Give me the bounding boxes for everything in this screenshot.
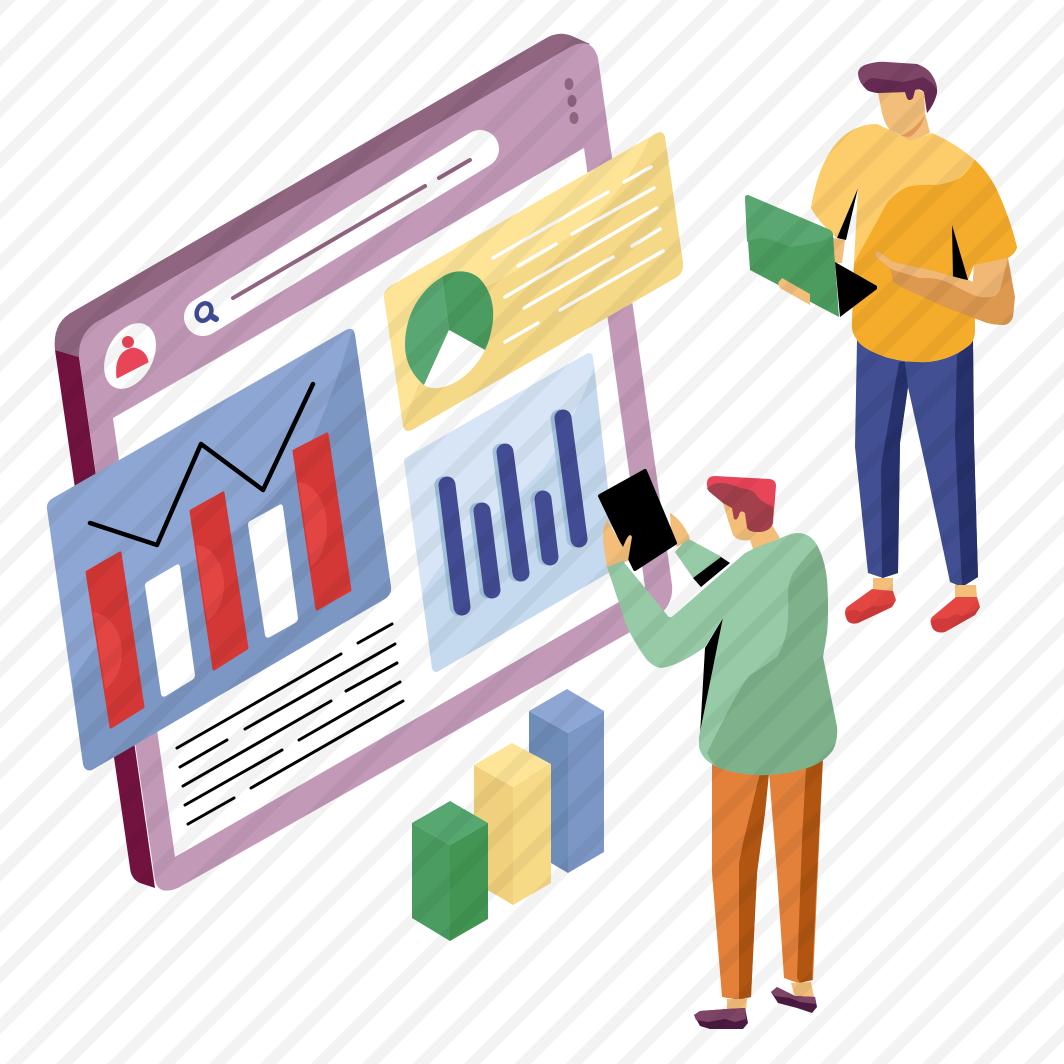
tablet: [600, 471, 675, 569]
far arm sleeve: [675, 538, 722, 578]
browser window: [55, 34, 672, 891]
t-shirt: [811, 124, 1017, 362]
window face: [79, 43, 672, 891]
bar 3: [190, 491, 248, 671]
card text lines: [493, 167, 663, 342]
text lines on screen: [177, 624, 403, 824]
right hand: [670, 513, 690, 547]
person with laptop: [745, 62, 1017, 632]
face: [878, 85, 925, 135]
left shoe: [694, 1008, 748, 1029]
window left edge: [55, 350, 155, 888]
search text lines: [233, 160, 470, 298]
panel: light blue bar chart card: [404, 353, 617, 672]
neck shadow: [900, 115, 925, 137]
bar 4: [248, 504, 298, 638]
right shoe: [930, 597, 980, 632]
right shoe: [771, 987, 817, 1013]
forearm: [875, 251, 1015, 325]
line chart: [90, 384, 313, 545]
bar 5: [292, 432, 352, 611]
icon: user avatar: [94, 314, 166, 398]
ankles: [727, 982, 814, 1011]
pie chart: [405, 271, 493, 388]
screen area: [113, 148, 645, 857]
card shadow: [403, 133, 683, 431]
sleeve gap: [968, 265, 974, 282]
bar shadows: [443, 418, 575, 607]
card base: [47, 329, 391, 770]
blue block: [529, 689, 604, 873]
far arm: [833, 238, 845, 263]
legs: [712, 757, 823, 1000]
3d bar blocks: [412, 689, 604, 941]
icon: magnifier: [194, 301, 216, 323]
card shadow: [422, 365, 617, 672]
laptop base: [835, 262, 877, 317]
black gap: [693, 557, 730, 735]
panel: blue chart card: [47, 329, 391, 770]
person with tablet: [600, 471, 837, 1029]
card base: [404, 353, 617, 672]
card shadow: [72, 331, 391, 770]
bar 2: [145, 564, 195, 697]
window dots: [564, 78, 578, 124]
hand on laptop: [778, 278, 810, 305]
search bar: [203, 149, 480, 317]
black gaps: [837, 188, 968, 280]
neck: [900, 113, 930, 142]
window top edge: [55, 34, 590, 357]
ankles: [873, 578, 977, 598]
card base: [384, 132, 683, 431]
left hand: [603, 520, 632, 567]
hair: [707, 476, 776, 532]
laptop screen: [745, 195, 839, 317]
hair: [858, 62, 937, 113]
sweater: [607, 533, 837, 775]
bars: [447, 418, 579, 607]
panel: yellow pie chart card: [384, 132, 683, 431]
green block: [412, 801, 488, 941]
trousers: [855, 340, 978, 587]
bar 1: [86, 551, 144, 729]
neck and face: [723, 490, 780, 550]
yellow block: [474, 743, 551, 905]
left shoe: [845, 589, 896, 624]
